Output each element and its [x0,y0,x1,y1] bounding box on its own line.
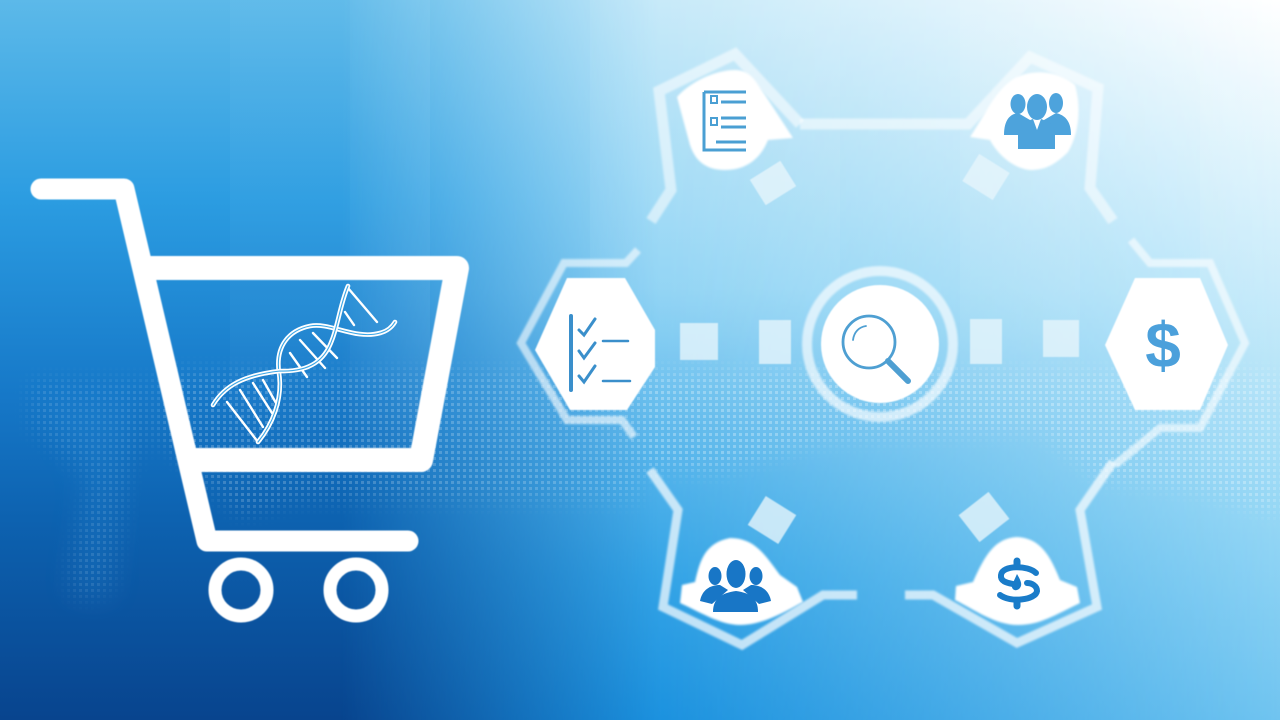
dotted world map backdrop [25,367,1280,602]
panel: bottom left node [680,538,803,625]
icon: DNA helix [213,286,395,442]
DNA rungs [227,288,377,442]
shopping cart [41,189,457,616]
search outer ring [807,271,953,417]
icon: people group [700,560,771,612]
DNA strand back [258,322,395,442]
icon: dollar with drop [1000,561,1037,606]
outline right hexagon [1115,240,1245,465]
panel: bottom right node [955,537,1080,625]
icon: document list [704,92,746,150]
panel: central search node [807,271,953,417]
outline bottom right [905,462,1113,643]
outline left hexagon [521,250,638,437]
panel: top left node [677,70,793,170]
panel: right node [1105,278,1228,410]
cart frame and handle [41,189,408,541]
search white disc [821,285,939,403]
icon: drop [1012,574,1021,590]
connector squares [680,154,1079,544]
cart wheel right [330,564,382,616]
outline bottom left [650,470,857,645]
DNA strand front [213,286,348,405]
network outline [521,54,1245,645]
cart basket [150,268,457,460]
icon: dollar sign: $ [1145,309,1181,381]
panel: top right node [970,72,1079,170]
icon: magnifying glass [843,316,908,381]
panel: left node [535,278,655,410]
outline top [651,54,800,221]
cart wheel left [215,564,267,616]
icon: checklist [571,316,630,390]
icon: business team [1004,93,1071,149]
